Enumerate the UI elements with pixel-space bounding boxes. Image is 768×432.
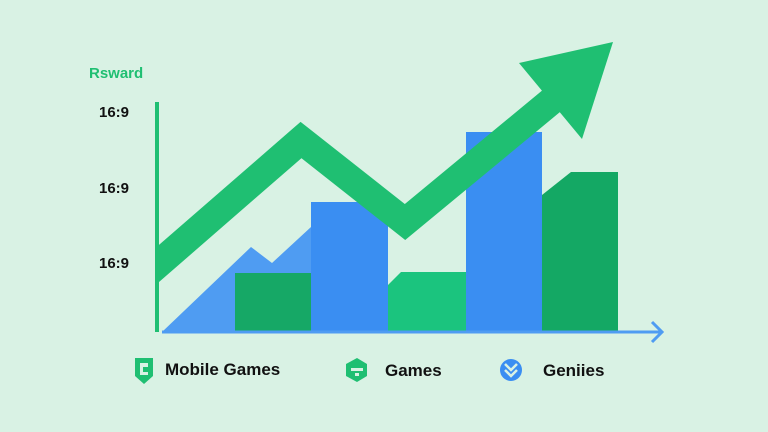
bar 2 [311,202,388,332]
y labels: 16:9 [99,255,129,272]
y labels: 16:9 [99,104,129,121]
legend: Geniies: Geniies [543,361,604,380]
y axis [155,102,159,332]
bar 1 [235,273,311,332]
bar 3 [388,272,466,332]
title label: Rsward [89,65,143,82]
legend: Games: Games [385,361,442,380]
legend: Mobile Games: Mobile Games [165,360,280,379]
y labels [99,104,129,272]
green trend arrow [140,42,613,280]
blue triangle area [162,227,311,332]
icon: games hexagon [346,358,367,382]
chart [135,42,664,384]
bar 4 [466,132,542,332]
x axis [162,322,662,342]
icon: genies circle [500,359,522,381]
y labels: 16:9 [99,180,129,197]
icon: mobile games shield [135,358,153,384]
bar 5 [542,172,618,332]
